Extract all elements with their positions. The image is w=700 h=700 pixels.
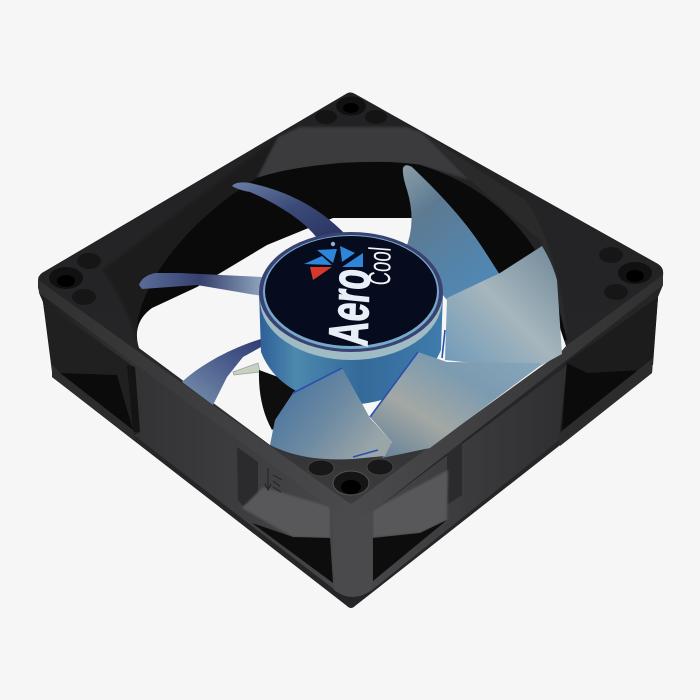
holes left corner bbox=[49, 253, 101, 305]
left shroud bbox=[103, 137, 278, 340]
blade: right bbox=[445, 246, 562, 366]
blue blade edges bbox=[293, 330, 445, 457]
left corner vent bbox=[43, 302, 140, 441]
rear blades bbox=[139, 165, 562, 405]
holes front corner bbox=[308, 459, 393, 495]
hub side bbox=[259, 292, 443, 405]
fan frame bbox=[38, 92, 663, 608]
blade: front left bbox=[270, 368, 392, 459]
front blades bbox=[270, 330, 541, 459]
opening bbox=[137, 218, 566, 456]
front vents bbox=[242, 470, 448, 583]
wire connector bbox=[233, 363, 260, 375]
logo mark bbox=[304, 242, 363, 280]
hub lower highlight bbox=[260, 240, 442, 360]
left side wall bbox=[39, 293, 335, 590]
top shroud lit bbox=[257, 127, 470, 180]
hub rim bbox=[259, 232, 443, 352]
motor base bbox=[259, 370, 300, 430]
moulded arrow and label marks bbox=[265, 468, 282, 492]
corner screw holes bbox=[49, 96, 652, 495]
logo text Cool: Cool bbox=[363, 246, 398, 287]
top rim band bbox=[38, 275, 663, 519]
right corner vent bbox=[558, 297, 658, 446]
holes top corner bbox=[315, 96, 387, 124]
frame silhouette bbox=[38, 92, 663, 608]
blade: top bbox=[403, 165, 500, 300]
blade: front right bbox=[370, 352, 541, 458]
right side wall bbox=[372, 297, 658, 590]
hub inner ring bbox=[263, 235, 439, 349]
dark side bands bbox=[237, 436, 462, 506]
holes right corner bbox=[599, 247, 652, 300]
inner wall bbox=[137, 162, 567, 420]
blade: left lower bbox=[182, 336, 272, 405]
hub top bbox=[259, 232, 443, 352]
top face bbox=[39, 92, 663, 504]
right shroud bbox=[423, 133, 567, 350]
blade: left upper bbox=[139, 273, 262, 296]
logo text Aero: Aero bbox=[318, 266, 382, 348]
front corner column bbox=[332, 510, 372, 597]
blade: top left bbox=[232, 182, 345, 238]
hub disc bbox=[265, 236, 437, 346]
